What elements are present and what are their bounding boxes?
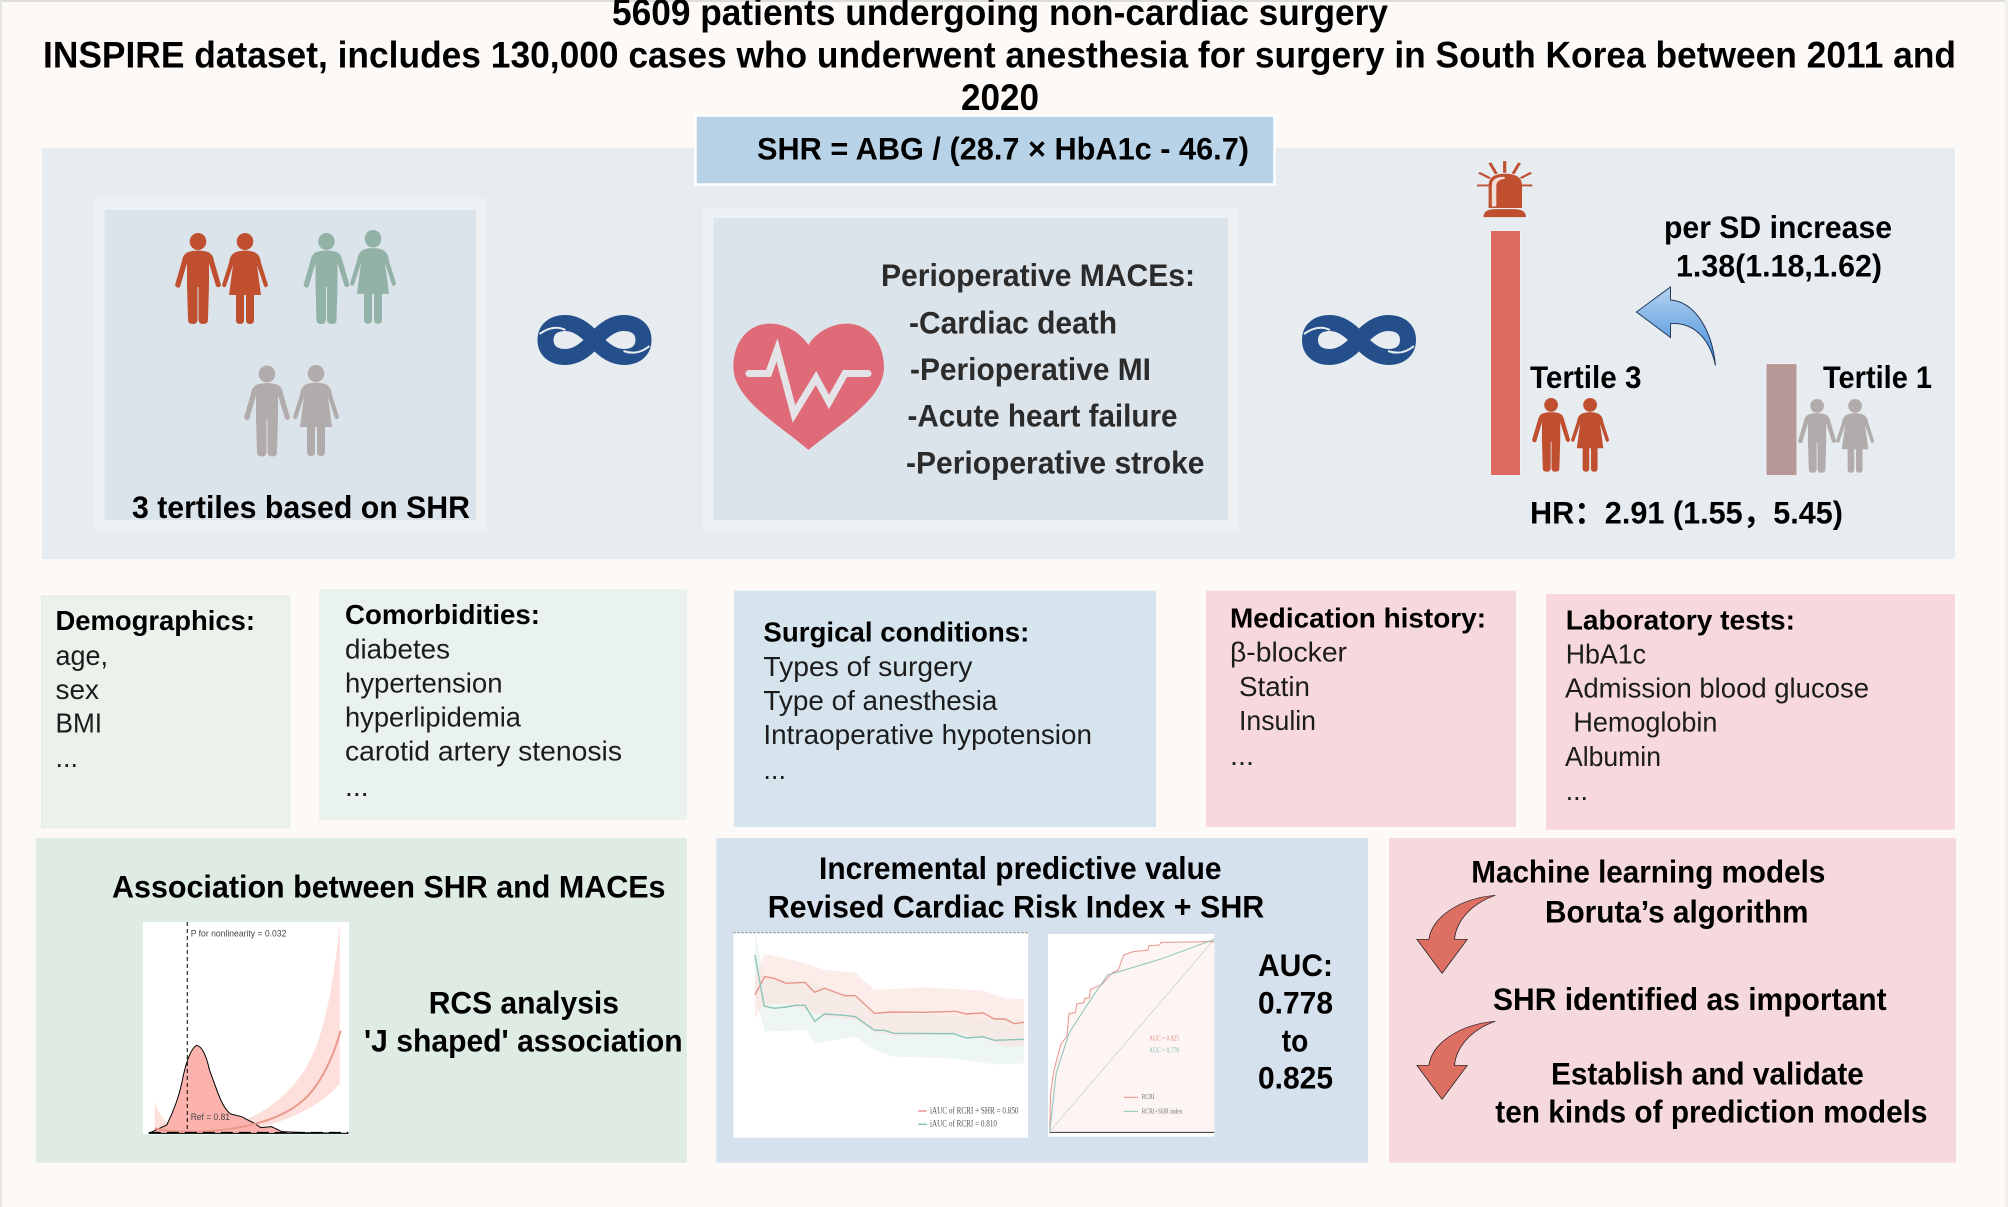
panel: comorbidities: ... [345, 771, 369, 802]
panel: tertiles [94, 198, 487, 531]
panel: demographics: age, [56, 640, 108, 671]
icon: alarm siren [1477, 161, 1532, 217]
panel: demographics: ... [56, 742, 78, 773]
panel: main study overview [42, 148, 1955, 559]
hazard ratio: HR：2.91 (1.55，5.45) [1530, 495, 1843, 531]
panel: laboratory tests: HbA1c [1566, 638, 1646, 669]
per SD increase text: per SD increase [1664, 209, 1892, 245]
panel: comorbidities: hyperlipidemia [345, 702, 521, 733]
chart: RCS curve: P for nonlinearity = 0.032 [191, 929, 286, 940]
MACEs list [881, 257, 1204, 480]
panel: machine learning [1389, 838, 1956, 1163]
chart: iAUC over time [734, 933, 1028, 1138]
panel: medication history: ... [1230, 740, 1254, 771]
icon: red couple tertile 3 [1532, 398, 1609, 472]
AUC text: 0.825 [1258, 1059, 1333, 1095]
label: tertile 1: Tertile 1 [1823, 359, 1932, 395]
chart: ROC curves: AUC = 0.825 [1149, 1034, 1179, 1043]
panel: laboratory tests: Laboratory tests: [1566, 604, 1795, 635]
RCS caption [364, 984, 683, 1059]
chart: ROC curves [1048, 934, 1214, 1137]
MACEs list: -Cardiac death [909, 304, 1117, 340]
AUC text [1258, 947, 1333, 1095]
text: SHR identified: SHR identified as important [1493, 981, 1887, 1017]
heading: association: Association between SHR and MACEs [112, 868, 666, 904]
panel: demographics: Demographics: [56, 605, 255, 636]
panel: medication history: β-blocker [1230, 637, 1347, 668]
label: tertile 3: Tertile 3 [1530, 359, 1642, 395]
SHR formula box [696, 116, 1274, 184]
text: machine learning models: Boruta’s algorithm [1545, 894, 1808, 930]
panel: medication history [1206, 591, 1516, 827]
panel: demographics: sex [56, 674, 99, 705]
chart: RCS curve: Ref = 0.81 [191, 1112, 230, 1123]
panel: comorbidities [319, 589, 687, 820]
panel: surgical conditions: ... [763, 754, 786, 785]
MACEs list: -Perioperative MI [910, 351, 1151, 387]
panel: association SHR and MACEs [36, 838, 687, 1163]
arrow: blue curved [1636, 287, 1716, 366]
per SD increase text [1664, 209, 1892, 283]
chart: ROC curves: RCRI [1142, 1092, 1155, 1101]
text: machine learning models: Machine learning models [1471, 854, 1825, 890]
title: 2020 [961, 76, 1039, 118]
panel: comorbidities: Comorbidities: [345, 599, 540, 630]
panel: perioperative MACEs [703, 208, 1239, 531]
panel: medication history: Medication history: [1230, 603, 1486, 634]
icon: infinity left [540, 323, 650, 357]
heading: incremental: Incremental predictive value [819, 850, 1222, 886]
arrow: down curved 1 [1417, 895, 1495, 973]
panel: comorbidities: hypertension [345, 668, 502, 699]
AUC text: AUC: [1258, 947, 1333, 983]
per SD increase text: 1.38(1.18,1.62) [1676, 247, 1882, 283]
chart: iAUC over time: iAUC of RCRI = 0.810 [930, 1119, 997, 1129]
panel: surgical conditions: Type of anesthesia [763, 685, 998, 716]
panel: surgical conditions: Surgical conditions: [763, 617, 1029, 648]
tertiles caption: 3 tertiles based on SHR [132, 489, 470, 525]
panel: laboratory tests: Albumin [1565, 741, 1661, 772]
icon: grey couple tertile 1 [1798, 399, 1874, 473]
MACEs list: -Perioperative stroke [906, 444, 1204, 480]
icon: infinity right [1304, 323, 1414, 357]
text: establish and validate: ten kinds of prediction models [1495, 1094, 1928, 1130]
panel: laboratory tests [1546, 594, 1955, 830]
text: establish and validate: Establish and validate [1551, 1055, 1864, 1091]
bar: tertile 1 [1766, 364, 1797, 476]
icon: heart with pulse [733, 324, 884, 450]
text: machine learning models [1471, 854, 1825, 930]
chart: RCS curve [143, 922, 349, 1134]
text: establish and validate [1495, 1055, 1928, 1130]
MACEs list: -Acute heart failure [908, 398, 1178, 434]
panel: laboratory tests: Admission blood glucose [1565, 672, 1869, 703]
MACEs list: Perioperative MACEs: [881, 257, 1195, 293]
RCS caption: 'J shaped' association [364, 1023, 683, 1059]
chart: ROC curves: AUC = 0.778 [1149, 1046, 1179, 1055]
bar: tertile 3 [1490, 230, 1520, 476]
AUC text: 0.778 [1258, 984, 1333, 1020]
heading: incremental [768, 850, 1265, 924]
arrow: down curved 2 [1417, 1021, 1495, 1099]
panel: laboratory tests: ... [1566, 775, 1588, 806]
icon: red couple [175, 233, 268, 324]
panel: demographics: BMI [56, 708, 102, 739]
panel: incremental predictive value [716, 838, 1368, 1163]
panel: surgical conditions: Types of surgery [763, 651, 972, 682]
panel: medication history: Statin [1239, 671, 1310, 702]
chart: iAUC over time: iAUC of RCRI + SHR = 0.850 [930, 1105, 1019, 1115]
chart: ROC curves: RCRI+SHR index [1142, 1106, 1183, 1115]
AUC text: to [1282, 1023, 1308, 1059]
icon: grey couple [244, 365, 339, 456]
panel: demographics [42, 596, 290, 828]
SHR formula box: SHR = ABG / (28.7 × HbA1c - 46.7) [757, 130, 1249, 166]
heading: incremental: Revised Cardiac Risk Index + SHR [768, 888, 1265, 924]
RCS caption: RCS analysis [429, 984, 619, 1020]
panel: medication history: Insulin [1239, 705, 1316, 736]
panel: surgical conditions [734, 591, 1156, 827]
panel: comorbidities: carotid artery stenosis [345, 736, 622, 767]
title [43, 0, 1956, 118]
panel: comorbidities: diabetes [345, 634, 450, 665]
icon: teal couple [304, 230, 396, 324]
panel: surgical conditions: Intraoperative hypotension [763, 719, 1092, 750]
panel: laboratory tests: Hemoglobin [1573, 707, 1717, 738]
